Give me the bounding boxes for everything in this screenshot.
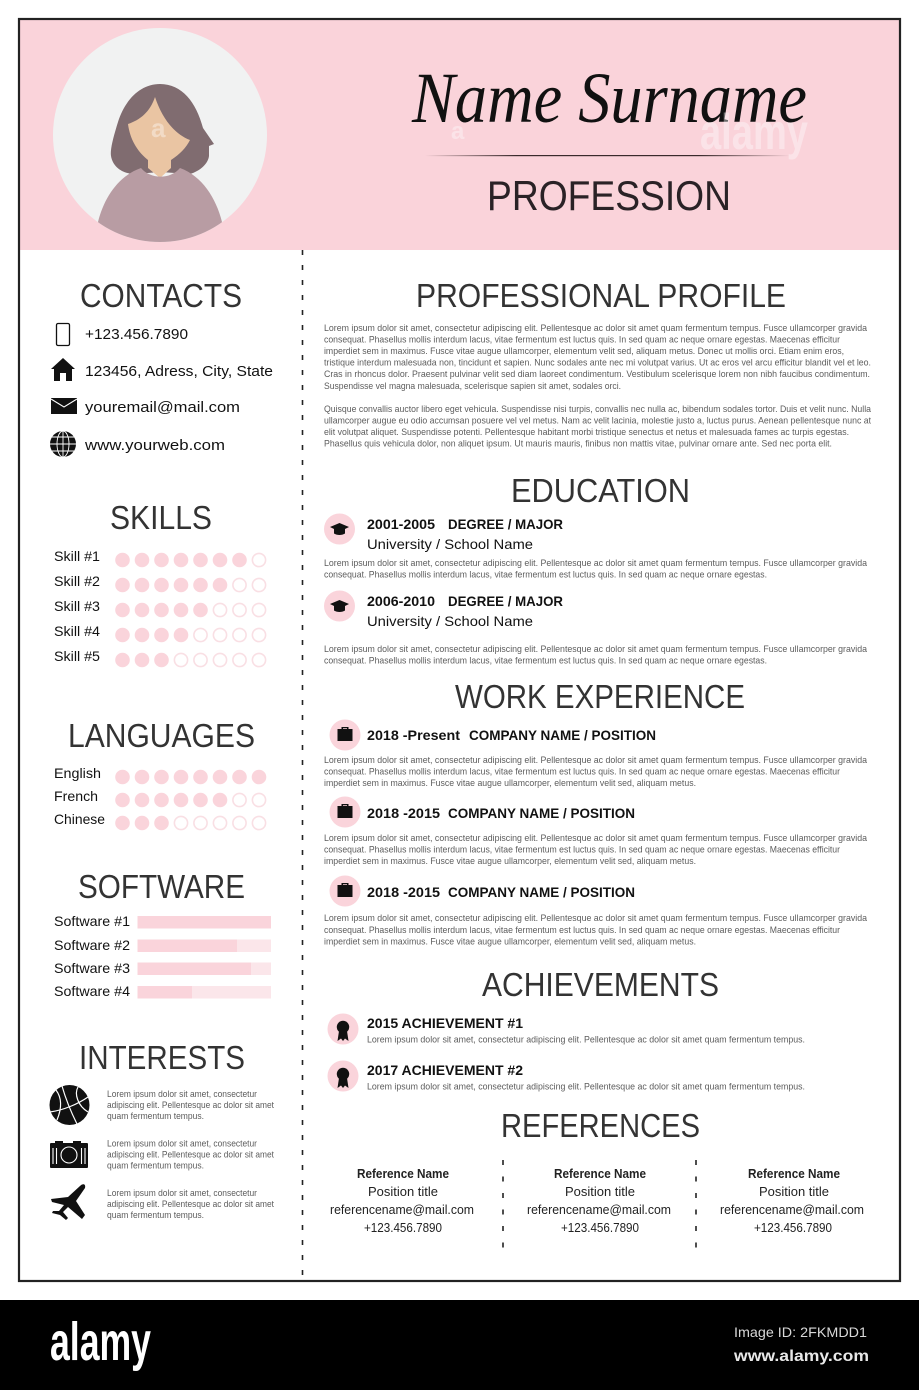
panel: header band	[19, 19, 900, 250]
heading: contacts: CONTACTS	[80, 278, 242, 315]
work entry 1	[324, 720, 868, 789]
heading: languages: LANGUAGES	[68, 718, 255, 755]
achievement 1	[328, 1014, 805, 1046]
reference 1: Reference Name	[357, 1166, 449, 1181]
text: profile paragraph 2	[324, 404, 872, 450]
footer url: www.alamy.com	[733, 1348, 869, 1365]
skill 3 rating: Skill #3	[54, 598, 100, 614]
text: interest 1	[107, 1089, 274, 1122]
software 2 bar	[54, 937, 271, 953]
skill 4 rating: Skill #4	[54, 623, 100, 639]
software 3 bar: Software #3	[54, 960, 130, 976]
text: profile paragraph 1: Lorem ipsum dolor sit amet, consectetur adipiscing elit. Pellentesque ac dolor sit amet quam fermentum tempus. Fusce ullamcorper gravida	[324, 323, 868, 334]
education entry 2: Lorem ipsum dolor sit amet, consectetur adipiscing elit. Pellentesque ac dolor sit amet quam fermentum tempus. Fusce ullamcorper gravida	[324, 644, 868, 655]
header rule	[425, 155, 790, 156]
heading: professional profile: PROFESSIONAL PROFILE	[416, 278, 786, 315]
text: interest 1: adipiscing elit. Pellentesque ac dolor sit amet	[107, 1100, 274, 1111]
work entry 1: imperdiet sem in maximus. Fusce vitae augue ullamcorper, elementum velit sed, aliquam metus.	[324, 778, 696, 789]
work entry 3: Lorem ipsum dolor sit amet, consectetur adipiscing elit. Pellentesque ac dolor sit amet quam fermentum tempus. Fusce ullamcorper gravida	[324, 913, 868, 924]
achievement 1: Lorem ipsum dolor sit amet, consectetur adipiscing elit. Pellentesque ac dolor sit amet quam fermentum tempus.	[367, 1034, 805, 1046]
text: profile paragraph 1: tristique interdum malesuada non, tincidunt et sapien. Nunc sodales ante nec mi volutpat varius. Ut ac eros vel arcu efficitur blandit vel et leo.	[324, 358, 871, 368]
software 1 bar: Software #1	[54, 913, 130, 929]
contact: website	[50, 431, 225, 457]
reference 1: +123.456.7890	[364, 1220, 442, 1235]
software 3 bar	[54, 960, 271, 976]
work entry 1: 2018 -Present	[367, 727, 460, 743]
work entry 1: Lorem ipsum dolor sit amet, consectetur adipiscing elit. Pellentesque ac dolor sit amet quam fermentum tempus. Fusce ullamcorper gravida	[324, 755, 868, 766]
work entry 3	[324, 876, 868, 948]
reference 3: +123.456.7890	[754, 1220, 832, 1235]
text: profile paragraph 2: elit volutpat aliquet. Suspendisse potenti. Pellentesque habitant morbi tristique senectus et netus et malesuada fames ac turpis egestas.	[324, 427, 849, 438]
education entry 1: Lorem ipsum dolor sit amet, consectetur adipiscing elit. Pellentesque ac dolor sit amet quam fermentum tempus. Fusce ullamcorper gravida	[324, 558, 868, 569]
education entry 1: University / School Name	[367, 536, 533, 552]
achievement 2: 2017 ACHIEVEMENT #2	[367, 1062, 523, 1078]
work entry 2: 2018 -2015	[367, 805, 440, 821]
work entry 3: imperdiet sem in maximus. Fusce vitae augue ullamcorper, elementum velit sed, aliquam metus.	[324, 936, 696, 948]
language English rating	[54, 765, 266, 784]
text: interest 2: quam fermentum tempus.	[107, 1160, 204, 1172]
text: profile paragraph 2: ullamcorper augue eu odio accumsan posuere vel vel metus. Nam ac velit lacinia, molestie justo a, luctus purus. Aenean pellentesque nunc at	[324, 416, 871, 426]
education entry 1	[324, 514, 868, 580]
work entry 2: consequat. Phasellus mollis interdum lacus, vitae fermentum est luctus quis. In sed quam ac neque ornare egestas. Maecenas efficitur	[324, 844, 840, 856]
watermark: a	[151, 113, 166, 143]
panel: achievements	[328, 967, 805, 1092]
text: interest 3	[107, 1188, 274, 1221]
contact: website: www.yourweb.com	[84, 437, 225, 454]
reference 3	[720, 1166, 864, 1235]
achievement 2: Lorem ipsum dolor sit amet, consectetur adipiscing elit. Pellentesque ac dolor sit amet quam fermentum tempus.	[367, 1082, 805, 1092]
reference 3: Position title	[759, 1184, 829, 1199]
text: profile paragraph 1: Suspendisse vel magna malesuada, scelerisque sapien sit amet, sodales orci.	[324, 381, 621, 392]
text: profile paragraph 2: Quisque convallis auctor libero eget vehicula. Suspendisse nisi turpis, convallis nec nulla ac, bibendum sodales tortor. Duis et velit nunc. Nulla	[324, 404, 872, 415]
work entry 2: Lorem ipsum dolor sit amet, consectetur adipiscing elit. Pellentesque ac dolor sit amet quam fermentum tempus. Fusce ullamcorper gravida	[324, 833, 868, 844]
column divider	[302, 250, 304, 1281]
text: profile paragraph 1	[324, 323, 871, 392]
education entry 2: DEGREE / MAJOR	[448, 593, 563, 609]
achievement 1: 2015 ACHIEVEMENT #1	[367, 1015, 523, 1031]
heading: software: SOFTWARE	[78, 869, 245, 906]
language English rating: English	[54, 765, 101, 781]
panel: skills	[54, 500, 266, 667]
watermark: a	[451, 118, 465, 145]
software 4 bar	[54, 983, 271, 999]
panel: work experience	[324, 679, 868, 948]
education entry 1: 2001-2005	[367, 516, 435, 532]
reference 3: referencename@mail.com	[720, 1202, 864, 1217]
avatar portrait	[53, 28, 267, 250]
text: interest 3: Lorem ipsum dolor sit amet, consectetur	[107, 1188, 257, 1199]
skill 2 rating	[54, 573, 266, 592]
text: interest 3: adipiscing elit. Pellentesque ac dolor sit amet	[107, 1199, 274, 1210]
language French rating	[54, 788, 266, 807]
panel: contacts	[50, 278, 273, 457]
heading: interests: INTERESTS	[79, 1040, 245, 1077]
work entry 3: 2018 -2015	[367, 884, 440, 900]
reference 2: referencename@mail.com	[527, 1202, 671, 1217]
panel: education	[324, 473, 868, 666]
reference 2: Reference Name	[554, 1166, 646, 1181]
reference 2: +123.456.7890	[561, 1220, 639, 1235]
contact: phone: +123.456.7890	[85, 326, 188, 343]
contact: phone	[56, 324, 188, 346]
contact: address: 123456, Adress, City, State	[85, 363, 273, 380]
education entry 2: University / School Name	[367, 613, 533, 629]
language Chinese rating	[54, 811, 266, 830]
panel: professional profile	[324, 278, 872, 450]
skill 1 rating	[54, 548, 266, 567]
watermark: alamy	[700, 104, 808, 160]
text: interest 2	[107, 1138, 274, 1172]
text: profile paragraph 1: Cras in rhoncus dolor. Praesent pulvinar velit sed diam laoreet condimentum. Vestibulum scelerisque lorem non nibh faucibus condimentum.	[324, 369, 870, 380]
skill 5 rating	[54, 648, 266, 667]
software 1 bar	[54, 913, 271, 929]
panel: references	[330, 1108, 864, 1258]
skill 1 rating: Skill #1	[54, 548, 100, 564]
reference 1: Position title	[368, 1184, 438, 1199]
heading: achievements: ACHIEVEMENTS	[482, 967, 719, 1004]
footer logo: alamy	[50, 1312, 151, 1372]
reference 3: Reference Name	[748, 1166, 840, 1181]
icon: airplane	[51, 1184, 85, 1220]
profession: PROFESSION	[487, 172, 731, 219]
education entry 1: DEGREE / MAJOR	[448, 516, 563, 532]
heading: skills: SKILLS	[110, 500, 212, 537]
text: profile paragraph 1: consequat. Phasellus mollis interdum lacus, vitae fermentum est luctus quis. In sed quam ac neque ornare egestas. Maecenas efficitur	[324, 334, 840, 346]
footer image id: Image ID: 2FKMDD1	[734, 1324, 867, 1340]
text: interest 1: quam fermentum tempus.	[107, 1111, 204, 1122]
text: profile paragraph 2: Phasellus quis vehicula dolor, non aliquet ipsum. Ut mauris mauris, finibus non mattis vitae, pulvinar ornare ante. Sed nec porta elit.	[324, 438, 832, 450]
icon: basketball	[50, 1085, 90, 1125]
skill 3 rating	[54, 598, 266, 617]
education entry 1: consequat. Phasellus mollis interdum lacus, vitae fermentum est luctus quis. In sed quam ac neque ornare egestas.	[324, 570, 767, 580]
work entry 1: consequat. Phasellus mollis interdum lacus, vitae fermentum est luctus quis. In sed quam ac neque ornare egestas. Maecenas efficitur	[324, 766, 840, 778]
language Chinese rating: Chinese	[54, 811, 105, 827]
reference 1: referencename@mail.com	[330, 1202, 474, 1217]
reference 1	[330, 1166, 474, 1235]
skill 2 rating: Skill #2	[54, 573, 100, 589]
work entry 2	[324, 796, 868, 867]
language French rating: French	[54, 788, 98, 804]
reference 2	[527, 1166, 671, 1235]
reference 2: Position title	[565, 1184, 635, 1199]
achievement 2	[328, 1060, 805, 1092]
heading: work experience: WORK EXPERIENCE	[455, 679, 745, 716]
education entry 2: consequat. Phasellus mollis interdum lacus, vitae fermentum est luctus quis. In sed quam ac neque ornare egestas.	[324, 656, 767, 666]
work entry 2: imperdiet sem in maximus. Fusce vitae augue ullamcorper, elementum velit sed, aliquam metus.	[324, 856, 696, 867]
text: interest 1: Lorem ipsum dolor sit amet, consectetur	[107, 1089, 257, 1100]
panel: footer bar	[0, 1300, 919, 1390]
watermark	[151, 104, 808, 160]
name: Name Surname	[411, 58, 807, 138]
panel: languages	[54, 718, 266, 830]
text: interest 3: quam fermentum tempus.	[107, 1210, 204, 1221]
work entry 1: COMPANY NAME / POSITION	[469, 727, 656, 743]
text: interest 2: adipiscing elit. Pellentesque ac dolor sit amet	[107, 1150, 274, 1160]
panel: software	[54, 869, 271, 999]
contact: address	[51, 358, 273, 381]
heading: education: EDUCATION	[511, 473, 690, 510]
icon: camera	[50, 1141, 88, 1168]
software 2 bar: Software #2	[54, 937, 130, 953]
skill 4 rating	[54, 623, 266, 642]
text: interest 2: Lorem ipsum dolor sit amet, consectetur	[107, 1138, 257, 1150]
heading: references: REFERENCES	[501, 1108, 700, 1145]
software 4 bar: Software #4	[54, 983, 130, 999]
panel: interests	[50, 1040, 274, 1221]
work entry 3: COMPANY NAME / POSITION	[448, 884, 635, 900]
contact: email: youremail@mail.com	[85, 399, 240, 416]
text: profile paragraph 1: imperdiet sem in maximus. Fusce vitae augue ullamcorper, elementum velit sed, aliquam metus. Donec ut mollis orci. Etiam enim eros,	[324, 346, 844, 357]
skill 5 rating: Skill #5	[54, 648, 100, 664]
work entry 3: consequat. Phasellus mollis interdum lacus, vitae fermentum est luctus quis. In sed quam ac neque ornare egestas. Maecenas efficitur	[324, 925, 840, 936]
education entry 2	[324, 590, 868, 666]
work entry 2: COMPANY NAME / POSITION	[448, 805, 635, 821]
education entry 2: 2006-2010	[367, 593, 435, 609]
